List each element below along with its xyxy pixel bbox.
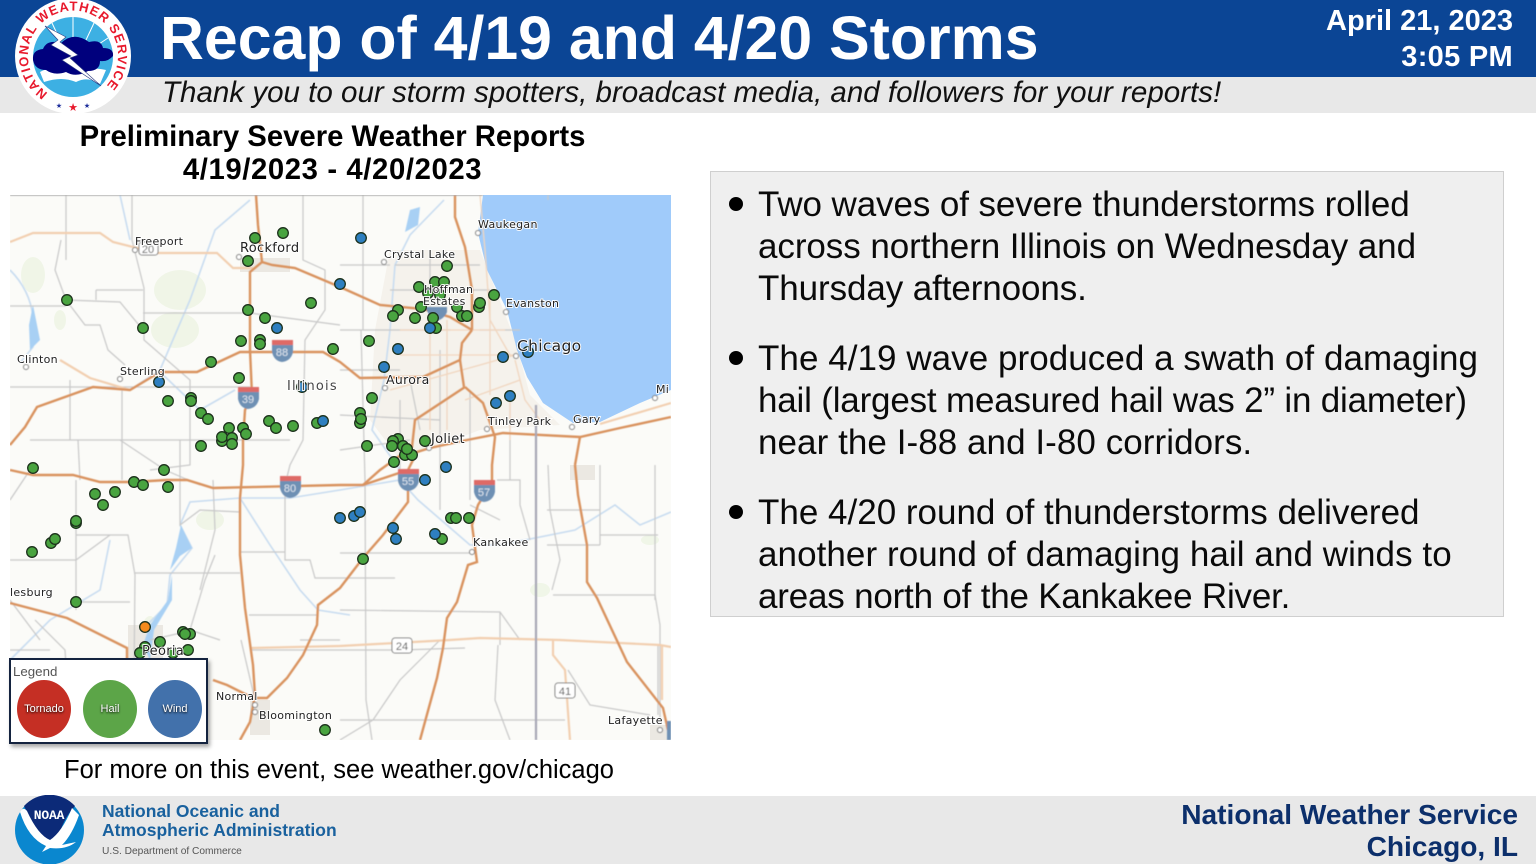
- bullet three text: areas north of the Kankakee River.: [758, 577, 1290, 616]
- county and state roads: [10, 195, 660, 740]
- US highway shields: 24: [396, 641, 408, 653]
- green vegetation: [21, 257, 659, 644]
- legend title: Legend: [13, 664, 57, 679]
- state lines: [10, 194, 483, 196]
- subtitle band: [0, 77, 1536, 113]
- bullet three text: The 4/20 round of thunderstorms delivered: [758, 493, 1420, 532]
- NOAA name: Atmospheric Administration: [102, 820, 337, 840]
- city labels: Tinley Park: [487, 415, 552, 428]
- lake michigan: [478, 195, 671, 423]
- date and time: 3:05 PM: [1401, 41, 1513, 73]
- NOAA wordmark: [102, 801, 337, 857]
- map source note: For more on this event, see weather.gov/chicago: [64, 756, 614, 784]
- title: Recap of 4/19 and 4/20 Storms: [160, 4, 1039, 72]
- city labels: Illinois: [287, 379, 338, 394]
- US highway shields: 41: [559, 686, 571, 698]
- city labels: Gary: [573, 413, 601, 426]
- interstate shields: 57: [478, 487, 490, 499]
- bullet one text: Thursday afternoons.: [758, 269, 1087, 308]
- office name: [1181, 799, 1518, 862]
- map heading: Preliminary Severe Weather Reports: [80, 120, 585, 153]
- interstates: [10, 195, 671, 740]
- city labels: lesburg: [10, 586, 53, 599]
- bullet three text: another round of damaging hail and winds to: [758, 535, 1452, 574]
- legend: tornado: Tornado: [24, 703, 64, 715]
- bullet one text: [758, 185, 1416, 308]
- interstate shields: 39: [242, 394, 254, 406]
- US highways light: [10, 233, 671, 740]
- subtitle: Thank you to our storm spotters, broadcast media, and followers for your reports!: [162, 76, 1221, 109]
- bullet one text: Two waves of severe thunderstorms rolled: [758, 185, 1410, 224]
- map heading: [80, 120, 585, 186]
- city labels: Chicago: [517, 337, 581, 355]
- bullet one marker: [729, 197, 743, 211]
- bullet two text: The 4/19 wave produced a swath of damaging: [758, 339, 1478, 378]
- city labels: Crystal Lake: [384, 248, 455, 261]
- footer band: [0, 796, 1536, 864]
- map of severe weather reports: [10, 195, 671, 740]
- legend: wind: Wind: [162, 703, 188, 715]
- icon: National Weather Service logo: ★: [56, 102, 62, 110]
- legend: wind: [148, 680, 202, 738]
- metro areas: [128, 250, 670, 740]
- city labels: Estates: [423, 295, 466, 308]
- US highway shields: 20: [142, 244, 154, 256]
- river lakes: [29, 207, 420, 660]
- city labels: Evanston: [506, 297, 559, 310]
- city labels: Lafayette: [608, 714, 663, 727]
- header band: [0, 0, 1536, 77]
- city labels: Joliet: [430, 432, 465, 447]
- icon: National Weather Service logo: ★: [84, 102, 90, 110]
- legend: hail: [83, 680, 137, 738]
- icon: National Weather Service logo: ★: [68, 102, 78, 114]
- chicago street grid: [390, 195, 540, 440]
- city labels: Normal: [216, 690, 258, 703]
- legend: tornado: [17, 680, 71, 738]
- city labels: [10, 218, 669, 727]
- city labels: Hoffman: [424, 283, 473, 296]
- bullet two text: hail (largest measured hail was 2” in diameter): [758, 381, 1467, 420]
- panel: summary bullets: [710, 171, 1504, 617]
- icon: NOAA logo: NOAA: [34, 808, 65, 823]
- city labels: Sterling: [120, 365, 165, 378]
- hail, wind and tornado report dots: [27, 228, 533, 735]
- NOAA name: [102, 801, 337, 840]
- city labels: Waukegan: [478, 218, 538, 231]
- interstate shields: 55: [402, 476, 414, 488]
- bullet two marker: [729, 351, 743, 365]
- interstate shields: 88: [276, 347, 288, 359]
- date and time: April 21, 2023: [1326, 5, 1513, 37]
- icon: National Weather Service logo: NATIONAL WEATHER SERVICE: [19, 2, 128, 100]
- bullet one text: across northern Illinois on Wednesday and: [758, 227, 1416, 266]
- city labels: Peoria: [142, 644, 184, 659]
- city labels: Rockford: [240, 241, 299, 256]
- bullet two text: [758, 339, 1478, 462]
- office name: Chicago, IL: [1367, 831, 1518, 862]
- NOAA department: U.S. Department of Commerce: [102, 846, 242, 857]
- city labels: Clinton: [17, 353, 58, 366]
- map legend: [9, 658, 208, 744]
- interstate shields: 80: [284, 483, 296, 495]
- office name: National Weather Service: [1181, 799, 1518, 830]
- bullet three text: [758, 493, 1452, 616]
- rivers: [10, 195, 671, 660]
- city labels: Freeport: [135, 235, 184, 248]
- date and time: [1326, 5, 1513, 73]
- city labels: Mi: [656, 383, 669, 396]
- city markers: [24, 230, 662, 732]
- NOAA name: National Oceanic and: [102, 801, 280, 821]
- city labels: Bloomington: [259, 709, 332, 722]
- legend: hail: Hail: [101, 703, 119, 715]
- city labels: Aurora: [386, 372, 430, 387]
- city labels: Kankakee: [473, 536, 529, 549]
- map heading: 4/19/2023 - 4/20/2023: [183, 153, 482, 186]
- icon: NOAA logo: [15, 795, 84, 864]
- interstate shields: [238, 307, 671, 740]
- bullet three marker: [729, 505, 743, 519]
- US highway shields: [139, 242, 575, 698]
- bullet two text: near the I-88 and I-80 corridors.: [758, 423, 1252, 462]
